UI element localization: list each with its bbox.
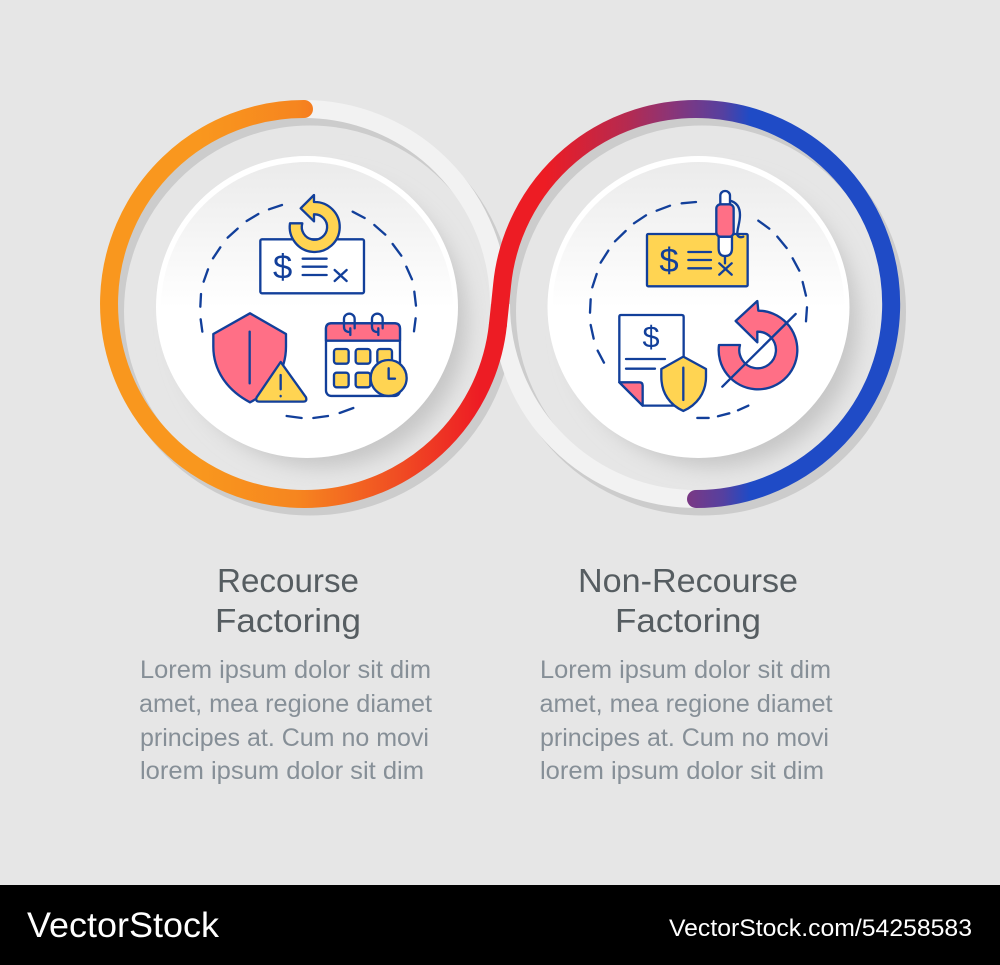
- footer bar: [0, 885, 1000, 965]
- icon: document with shield: [619, 315, 706, 411]
- left ring shadow: [115, 116, 505, 506]
- right inner disc: [548, 156, 850, 458]
- text block: recourse description: lorem ipsum dolor sit dim: [140, 757, 424, 785]
- dashed circle right: [590, 202, 807, 418]
- right disc shadow: [568, 177, 858, 467]
- right icon group: [590, 191, 807, 418]
- icon: shield with warning: [213, 313, 306, 402]
- text block: non-recourse description: principes at. Cum no movi: [540, 724, 829, 752]
- icon: cheque: [260, 239, 364, 293]
- icon: return arrow: [290, 195, 340, 252]
- icon: crossed return arrow: [719, 301, 797, 389]
- left inner disc: [156, 156, 458, 458]
- heading: non-recourse factoring: Factoring: [615, 602, 761, 639]
- left disc shadow: [177, 177, 467, 467]
- heading: recourse factoring: Factoring: [215, 602, 361, 639]
- text block: non-recourse description: Lorem ipsum dolor sit dim: [540, 656, 831, 684]
- icon: calendar with clock: [326, 314, 407, 396]
- heading: non-recourse factoring: [578, 562, 798, 639]
- dashed circle left: [200, 205, 416, 418]
- icon: signed cheque: $: [659, 242, 679, 280]
- right coloured ring, red to blue: [498, 109, 891, 499]
- left icon group: [200, 195, 416, 418]
- footer logo: VectorStock: [27, 906, 220, 945]
- text block: recourse description: [139, 656, 432, 785]
- icon: pen: [716, 191, 743, 256]
- left ring track: [304, 109, 499, 304]
- text block: recourse description: amet, mea regione diamet: [139, 690, 432, 718]
- icon: signed cheque: [647, 234, 748, 286]
- right ring shadow: [507, 116, 897, 506]
- icon: document with shield: $: [642, 321, 660, 355]
- right ring track: [501, 304, 696, 499]
- icon: cheque: $: [273, 249, 292, 287]
- text block: recourse description: Lorem ipsum dolor sit dim: [140, 656, 431, 684]
- heading: recourse factoring: [215, 562, 361, 639]
- heading: recourse factoring: Recourse: [217, 562, 359, 599]
- text block: non-recourse description: [540, 656, 833, 785]
- heading: non-recourse factoring: Non-Recourse: [578, 562, 798, 599]
- text block: recourse description: principes at. Cum no movi: [140, 724, 429, 752]
- text block: non-recourse description: amet, mea regione diamet: [540, 690, 833, 718]
- left coloured ring, orange to red: [109, 109, 498, 499]
- text block: non-recourse description: lorem ipsum dolor sit dim: [540, 757, 824, 785]
- footer image id: VectorStock.com/54258583: [669, 915, 972, 942]
